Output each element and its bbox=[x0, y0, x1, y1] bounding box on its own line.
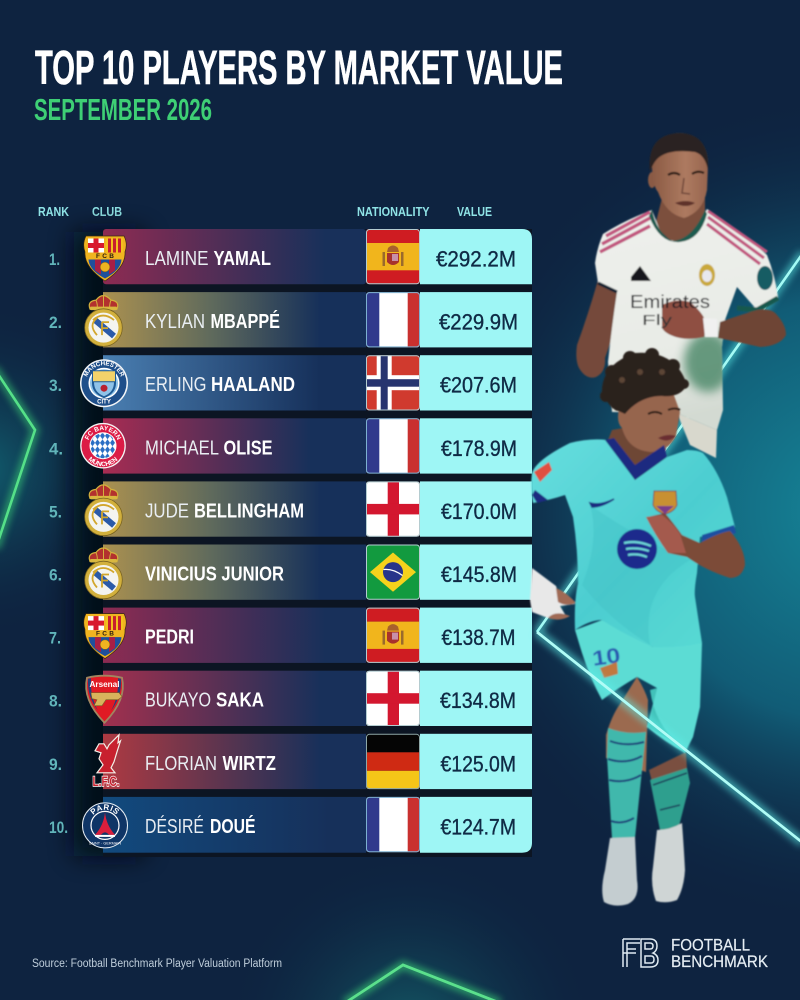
crest: FC Barcelona bbox=[84, 614, 126, 659]
value text: €145.8M bbox=[441, 562, 517, 587]
logos on shirt bbox=[590, 499, 614, 507]
row 7: Pedri bbox=[49, 608, 532, 663]
table shadow bbox=[74, 229, 532, 857]
name: PEDRI bbox=[145, 626, 194, 649]
value text: €134.8M bbox=[440, 688, 516, 713]
cyan neon line upper bbox=[537, 253, 800, 632]
flag: England bbox=[366, 481, 420, 537]
name: DÉSIRÉ bbox=[145, 815, 204, 838]
crest: Real Madrid bbox=[85, 295, 122, 346]
logo: Football Benchmark: BENCHMARK bbox=[671, 952, 769, 971]
name: ERLING bbox=[145, 373, 206, 396]
green neon line left bbox=[0, 368, 35, 548]
icon: FB monogram bbox=[623, 939, 658, 967]
shorts bbox=[575, 620, 702, 753]
value text: €125.0M bbox=[440, 751, 516, 776]
name bbox=[145, 499, 304, 522]
crest: Paris Saint-Germain bbox=[82, 802, 128, 848]
player: Kylian Mbappé: Emirates bbox=[630, 292, 710, 312]
name: FLORIAN bbox=[145, 752, 217, 775]
crest: Arsenal: Arsenal bbox=[90, 679, 120, 689]
value bbox=[420, 229, 532, 284]
row 9: Florian Wirtz bbox=[49, 734, 532, 789]
value text: €178.9M bbox=[441, 436, 517, 461]
crest: Liverpool: L.F.C. bbox=[92, 773, 120, 789]
green neon line bottom bbox=[345, 965, 500, 1000]
logo: Football Benchmark: FOOTBALL bbox=[671, 936, 750, 954]
table header: NATIONALITY bbox=[357, 205, 430, 219]
name: OLISE bbox=[224, 436, 272, 459]
value bbox=[420, 797, 532, 853]
rank: 2. bbox=[49, 313, 62, 332]
rank: 4. bbox=[49, 439, 63, 458]
rank: 9. bbox=[49, 755, 62, 774]
player: Kylian Mbappé: Fly bbox=[642, 312, 673, 329]
name: SAKA bbox=[216, 689, 264, 712]
row 2: Kylian Mbappé bbox=[49, 292, 532, 347]
flag: Norway bbox=[366, 355, 420, 410]
value text: €170.0M bbox=[441, 499, 517, 524]
crest: Manchester City: CITY bbox=[97, 400, 111, 406]
name bbox=[145, 373, 295, 396]
row 8: Bukayo Saka bbox=[49, 671, 532, 726]
rank: 6. bbox=[49, 566, 62, 584]
logo: Football Benchmark bbox=[623, 936, 769, 971]
flag: England bbox=[366, 671, 420, 726]
crest: Bayern Munich: MÜNCHEN bbox=[88, 456, 118, 466]
row 3: Erling Haaland bbox=[49, 355, 532, 410]
table header: RANK bbox=[38, 205, 69, 219]
value bbox=[420, 544, 532, 600]
value text: €124.7M bbox=[440, 814, 516, 839]
jersey bbox=[531, 439, 735, 647]
crest: Bayern Munich bbox=[80, 422, 126, 468]
flag: Germany bbox=[366, 734, 420, 789]
value bbox=[420, 481, 532, 537]
name bbox=[145, 310, 280, 333]
rank: 8. bbox=[49, 692, 62, 711]
value bbox=[420, 608, 532, 663]
name: HAALAND bbox=[211, 373, 295, 396]
table header: CLUB bbox=[92, 205, 122, 219]
crest: Manchester City bbox=[80, 359, 128, 408]
neck and face bbox=[606, 420, 668, 482]
crest: Paris Saint-Germain: PARIS bbox=[90, 804, 119, 815]
value text: €207.6M bbox=[440, 373, 517, 398]
player: Lamine Yamal: 10 bbox=[591, 644, 622, 671]
name: BUKAYO bbox=[145, 689, 211, 712]
name: DOUÉ bbox=[210, 815, 256, 838]
value bbox=[420, 292, 532, 347]
name: VINICIUS JUNIOR bbox=[145, 562, 284, 586]
value text: €229.9M bbox=[439, 310, 518, 335]
row 1: Lamine Yamal bbox=[49, 229, 532, 284]
value bbox=[420, 734, 532, 789]
legs bbox=[606, 677, 648, 772]
source note: Source: Football Benchmark Player Valuation Platform bbox=[32, 958, 282, 970]
crest: Liverpool bbox=[92, 735, 120, 789]
name: MBAPPÉ bbox=[210, 310, 280, 333]
crest: FC Barcelona: FCB bbox=[96, 253, 114, 260]
value text: €138.7M bbox=[442, 625, 516, 650]
flag: France bbox=[366, 292, 420, 347]
flag: Spain bbox=[366, 229, 420, 284]
rank: 5. bbox=[49, 502, 62, 521]
flag: France bbox=[366, 418, 420, 474]
name bbox=[145, 247, 271, 270]
name: MICHAEL bbox=[145, 436, 219, 459]
value bbox=[420, 418, 532, 474]
flag: France bbox=[366, 797, 420, 852]
subtitle: SEPTEMBER 2026 bbox=[34, 92, 212, 127]
name bbox=[145, 815, 256, 838]
player left hand bbox=[530, 568, 575, 618]
name: JUDE bbox=[145, 499, 189, 522]
crest: FC Barcelona bbox=[84, 236, 126, 281]
row 4: Michael Olise bbox=[49, 418, 532, 474]
name bbox=[145, 752, 276, 775]
right arm bbox=[648, 513, 745, 578]
value text: €292.2M bbox=[436, 246, 516, 272]
crest: Arsenal bbox=[86, 676, 123, 723]
value bbox=[420, 671, 532, 726]
crest: Real Madrid bbox=[85, 548, 122, 599]
rank: 10. bbox=[49, 818, 68, 837]
name: LAMINE bbox=[145, 247, 208, 270]
table header: VALUE bbox=[457, 205, 492, 219]
name: YAMAL bbox=[214, 247, 271, 270]
name: WIRTZ bbox=[222, 752, 276, 775]
crest: FC Barcelona: FCB bbox=[96, 631, 114, 638]
crest: Bayern Munich: FC BAYERN bbox=[84, 426, 122, 440]
cyan neon line lower bbox=[537, 632, 800, 843]
player: Lamine Yamal bbox=[530, 348, 745, 906]
player: Kylian Mbappé bbox=[576, 133, 786, 458]
row 10: Désiré Doué bbox=[49, 796, 532, 853]
crest: Paris Saint-Germain: SAINT · GERMAIN bbox=[89, 841, 121, 845]
table header bbox=[38, 205, 492, 219]
value bbox=[420, 355, 532, 410]
rank: 3. bbox=[49, 376, 62, 395]
hair bbox=[600, 348, 689, 414]
rank: 1. bbox=[49, 250, 60, 269]
name: BELLINGHAM bbox=[194, 499, 304, 522]
flag: Spain bbox=[366, 608, 420, 663]
crest: Manchester City: MANCHESTER bbox=[83, 360, 124, 377]
row 5: Jude Bellingham bbox=[49, 481, 532, 537]
rank: 7. bbox=[49, 629, 61, 648]
name: KYLIAN bbox=[145, 310, 205, 333]
crest: Real Madrid bbox=[85, 484, 122, 536]
flag: Brazil bbox=[366, 544, 420, 600]
row 6: Vinicius Junior bbox=[49, 544, 532, 600]
